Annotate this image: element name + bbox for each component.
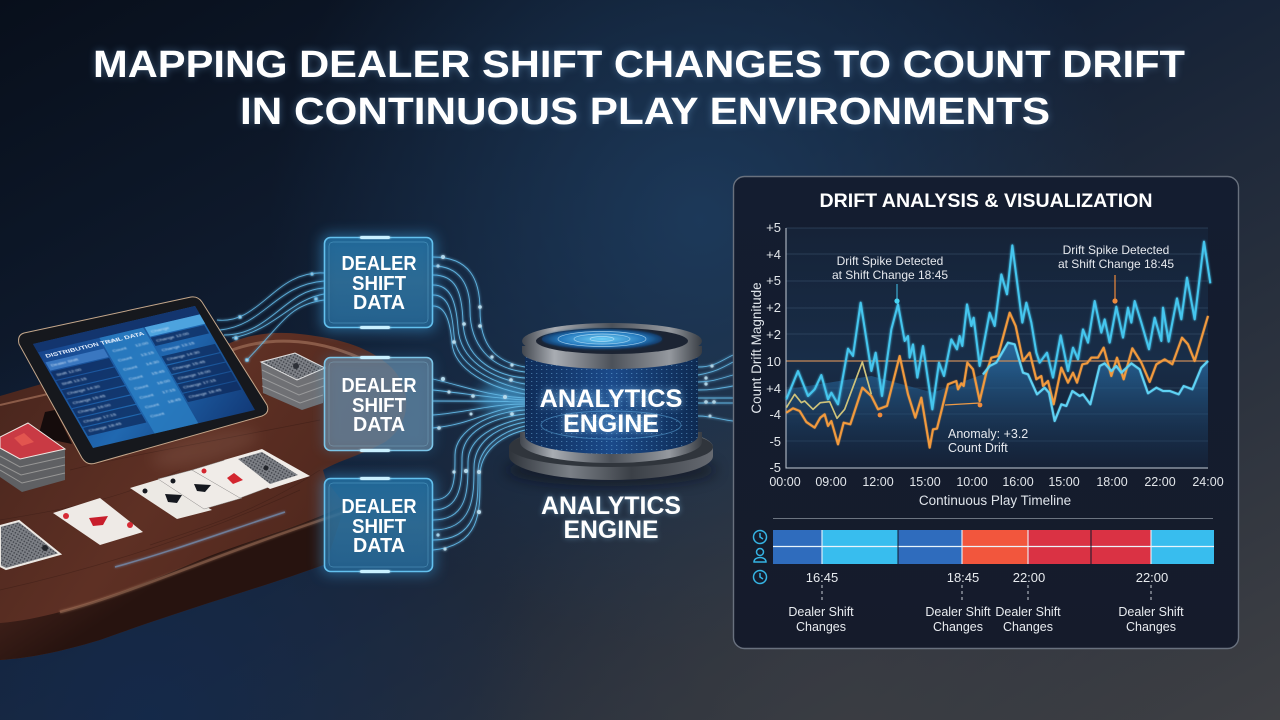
analytics engine caption: ANALYTICS [541, 492, 681, 520]
tablet screen: Count [117, 355, 134, 362]
tablet screen: Shift 12:00 [55, 367, 83, 377]
panel heading: DRIFT ANALYSIS & VISUALIZATION [820, 190, 1152, 212]
y axis title: Count Drift Magnitude [749, 282, 764, 414]
y axis labels: +4 [766, 247, 781, 262]
dealer shift data box 2: SHIFT [352, 395, 406, 417]
tablet screen: Dealer Shift [50, 357, 80, 367]
line chart [749, 220, 1224, 508]
series: pale yellow segment [786, 362, 871, 418]
card: face-down right [224, 449, 310, 489]
data flows: dealer boxes to engine [433, 255, 531, 551]
icon: clock [754, 570, 766, 584]
tablet screen: DISTRIBUTION TRAIL DATA [44, 331, 146, 359]
title: IN CONTINUOUS PLAY ENVIRONMENTS [240, 91, 1050, 133]
x axis labels [769, 475, 1224, 489]
y axis labels [766, 220, 781, 475]
y axis labels: +5 [766, 220, 781, 235]
tablet screen: Count [133, 383, 150, 390]
callout: drift spike left: at Shift Change 18:45 [832, 268, 948, 282]
tablet screen [33, 306, 255, 448]
tablet screen: Count [144, 402, 161, 409]
marker 2: Changes [933, 620, 983, 634]
dealer shift data box 1: SHIFT [352, 273, 406, 295]
dealer shift data box 3: SHIFT [352, 516, 406, 538]
tablet screen: Change 17:15 [82, 412, 117, 424]
data flows: engine to chart panel [698, 355, 733, 421]
callout: anomaly: Count Drift [948, 441, 1008, 455]
analytics engine caption: ENGINE [564, 516, 658, 544]
marker 2: Dealer Shift [925, 605, 991, 619]
x axis labels: 09:00 [815, 475, 847, 489]
tablet screen: Count [128, 374, 144, 381]
tablet [19, 297, 268, 464]
shift timeline bar [773, 530, 1214, 564]
dealer shift data box 3: DATA [353, 535, 405, 557]
tablet screen: Change 16:00 [177, 369, 212, 380]
dealer shift data box 1 [322, 235, 435, 330]
series: orange [786, 313, 1208, 448]
x axis title: Continuous Play Timeline [919, 493, 1071, 508]
tablet screen: 15:45 [150, 369, 166, 376]
dealer shift data box 2: DEALER [342, 375, 417, 397]
data flows: tablet to dealer box [217, 273, 324, 362]
dealer shift data box 2: DATA [353, 414, 405, 436]
tablet screen: Data [106, 337, 120, 344]
tablet screen: Change 16:00 [77, 403, 112, 414]
area fill [786, 343, 1208, 468]
series: blue [786, 242, 1210, 409]
marker 1: 16:45 [806, 570, 838, 585]
panel: drift analysis [734, 176, 1238, 648]
marker 4: Changes [1126, 620, 1176, 634]
marker 1: Dealer Shift [788, 605, 854, 619]
card deck red [0, 423, 65, 492]
tablet screen: 18:45 [167, 397, 182, 404]
marker 4: 22:00 [1136, 570, 1168, 585]
tablet screen: Change 15:45 [72, 394, 107, 405]
card deck grey [261, 353, 325, 410]
tablet screen: 16:00 [156, 378, 171, 385]
tablet screen: 12:00 [134, 341, 150, 348]
x axis labels: 22:00 [1144, 475, 1176, 489]
icon: person [754, 548, 766, 562]
shift change markers [788, 570, 1184, 634]
series: light blue [983, 343, 1208, 421]
casino table [0, 333, 406, 660]
tablet screen: Change 12:00 [155, 331, 190, 343]
x axis labels: 18:00 [1096, 475, 1128, 489]
title [93, 44, 1185, 133]
y axis labels: 10 [767, 354, 781, 369]
tablet screen: Change 13:15 [161, 341, 196, 352]
callout: anomaly [878, 403, 1028, 455]
axes [786, 228, 1208, 468]
tablet screen: Count [139, 393, 155, 400]
marker 4 [1118, 570, 1184, 634]
y axis labels: +5 [766, 273, 781, 288]
zero line [786, 360, 1208, 362]
card: ace of hearts [53, 498, 143, 545]
marker 3: 22:00 [1013, 570, 1045, 585]
callout: drift spike right [1058, 243, 1174, 304]
marker 3: Changes [1003, 620, 1053, 634]
playing cards [0, 449, 310, 569]
y axis labels: +2 [766, 327, 781, 342]
dealer shift data box 1: DATA [353, 292, 405, 314]
tablet screen: Change 15:45 [172, 360, 206, 371]
icon: clock [754, 530, 766, 544]
callout: drift spike right: at Shift Change 18:45 [1058, 257, 1174, 271]
tablet screen: Change [150, 325, 171, 333]
tablet screen: Shift 13:15 [61, 377, 88, 386]
dealer shift data box 3: DEALER [342, 496, 417, 518]
tablet screen: Count [149, 412, 166, 419]
callout: drift spike right: Drift Spike Detected [1063, 243, 1169, 257]
marker 2: 18:45 [947, 570, 979, 585]
card: diamond [192, 460, 272, 498]
tablet screen: Count [122, 365, 139, 372]
marker 2 [925, 570, 991, 634]
callout: drift spike left [832, 254, 948, 304]
marker 1 [788, 570, 854, 634]
x axis labels: 12:00 [862, 475, 894, 489]
marker 3: Dealer Shift [995, 605, 1061, 619]
marker 3 [995, 570, 1061, 634]
timeline icons [754, 530, 766, 584]
analytics engine caption [541, 492, 681, 544]
dealer shift data box 3 [322, 476, 435, 574]
y axis labels: -5 [769, 460, 781, 475]
tablet screen: Change 18:45 [188, 388, 223, 399]
tablet screen: 13:15 [140, 350, 155, 357]
x axis labels: 16:00 [1002, 475, 1034, 489]
engine label: ANALYTICS [540, 385, 682, 413]
tablet screen: 17:15 [161, 388, 177, 395]
dealer shift data box 2 [324, 356, 433, 452]
x axis labels: 00:00 [769, 475, 801, 489]
dealer shift data box 1: DEALER [342, 253, 417, 275]
tablet screen: Count [112, 346, 128, 353]
card: spade two [158, 470, 242, 509]
y axis labels: -5 [769, 434, 781, 449]
marker 1: Changes [796, 620, 846, 634]
x axis labels: 24:00 [1192, 475, 1224, 489]
card: face-down left [0, 521, 60, 569]
x axis labels: 15:00 [1048, 475, 1080, 489]
tablet screen: 14:30 [145, 360, 161, 366]
x axis labels: 15:00 [909, 475, 941, 489]
engine label: ENGINE [563, 410, 659, 438]
analytics engine cylinder [506, 323, 716, 486]
callout: drift spike left: Drift Spike Detected [837, 254, 943, 268]
tablet screen: Change 18:45 [88, 422, 123, 433]
y axis labels: -4 [769, 407, 781, 422]
title: MAPPING DEALER SHIFT CHANGES TO COUNT DRIFT [93, 44, 1185, 86]
y axis labels: +2 [766, 300, 781, 315]
card: spade one [130, 479, 212, 519]
tablet screen: Change 14:30 [166, 350, 201, 362]
engine label [540, 385, 682, 438]
marker 4: Dealer Shift [1118, 605, 1184, 619]
x axis labels: 10:00 [956, 475, 988, 489]
tablet screen: Change 17:15 [182, 378, 217, 390]
callout: anomaly: Anomaly: +3.2 [948, 427, 1028, 441]
y axis labels: +4 [766, 381, 781, 396]
tablet screen: Change 14:30 [66, 384, 101, 396]
